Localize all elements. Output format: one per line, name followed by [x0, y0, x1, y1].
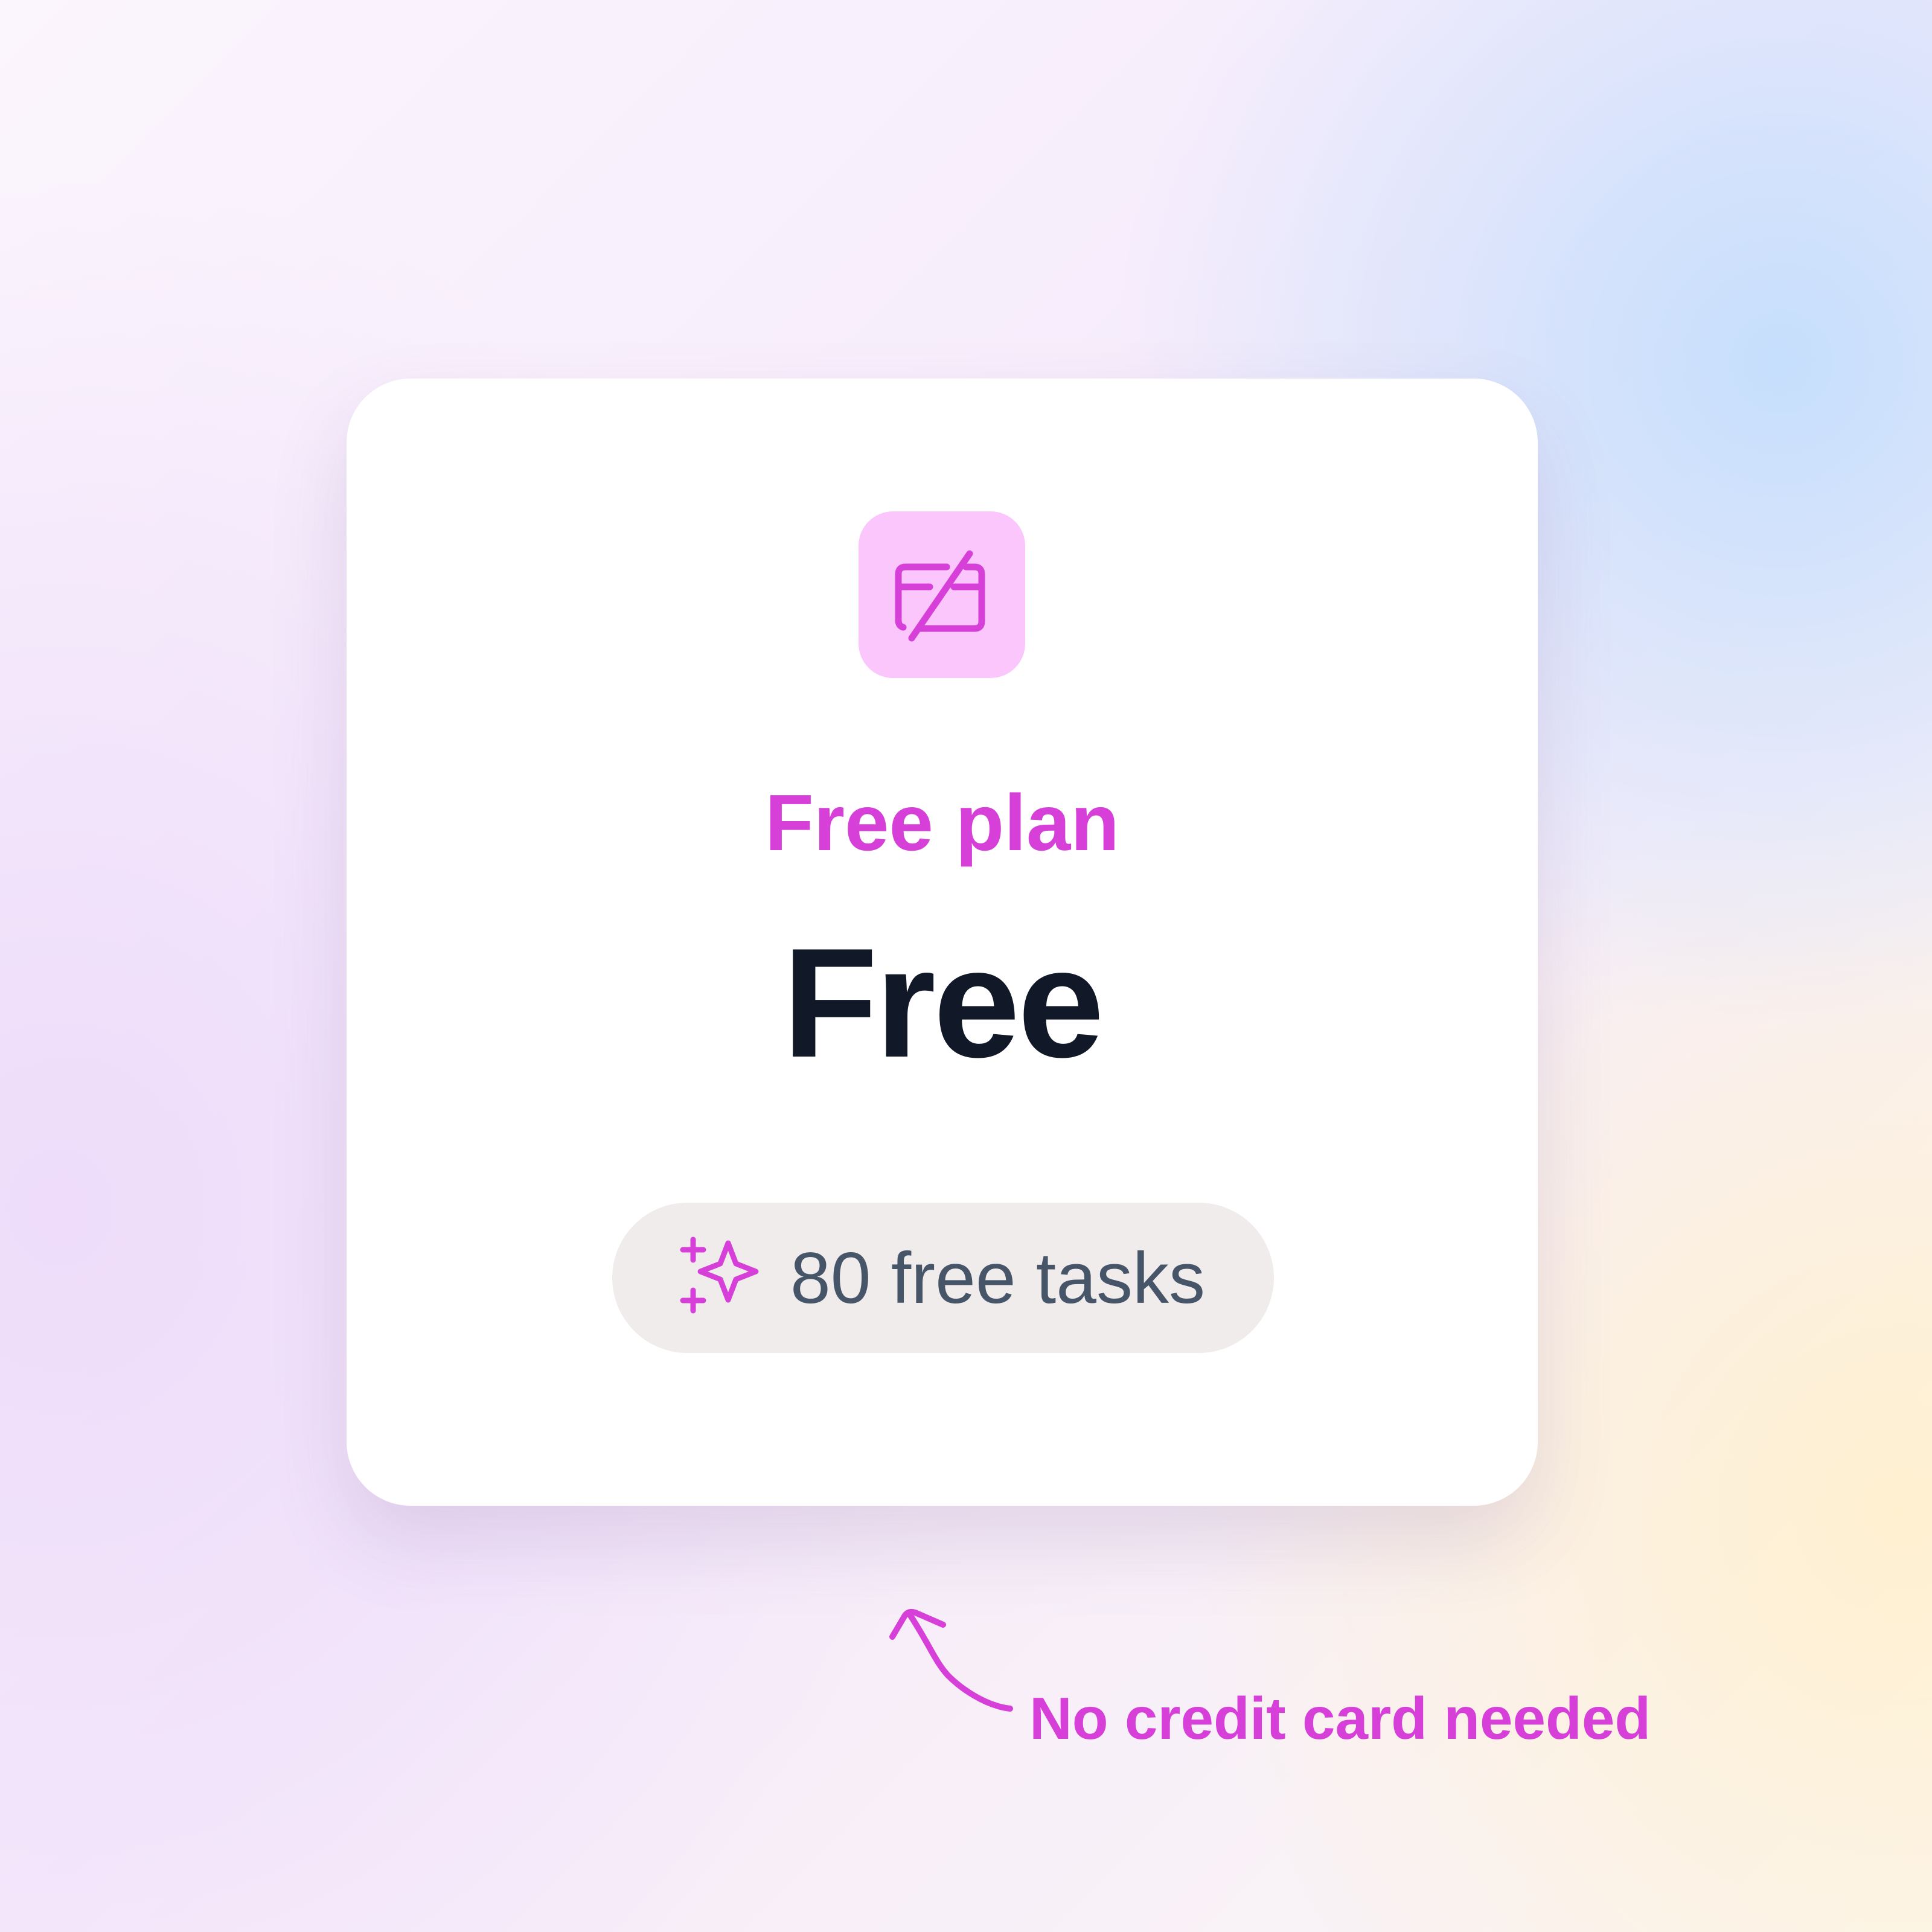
pill: 80 free tasks: 80 free tasks [790, 1238, 1205, 1319]
icon: credit card off [859, 511, 1025, 678]
card [347, 379, 1538, 1506]
pill: 80 free tasks [612, 1203, 1274, 1353]
callout text: No credit card needed [1029, 1685, 1651, 1751]
icon: sparkles [680, 1236, 758, 1314]
price: Free: Free [782, 915, 1102, 1090]
arrow [889, 1608, 1013, 1712]
heading: Free plan: Free plan [765, 778, 1119, 867]
